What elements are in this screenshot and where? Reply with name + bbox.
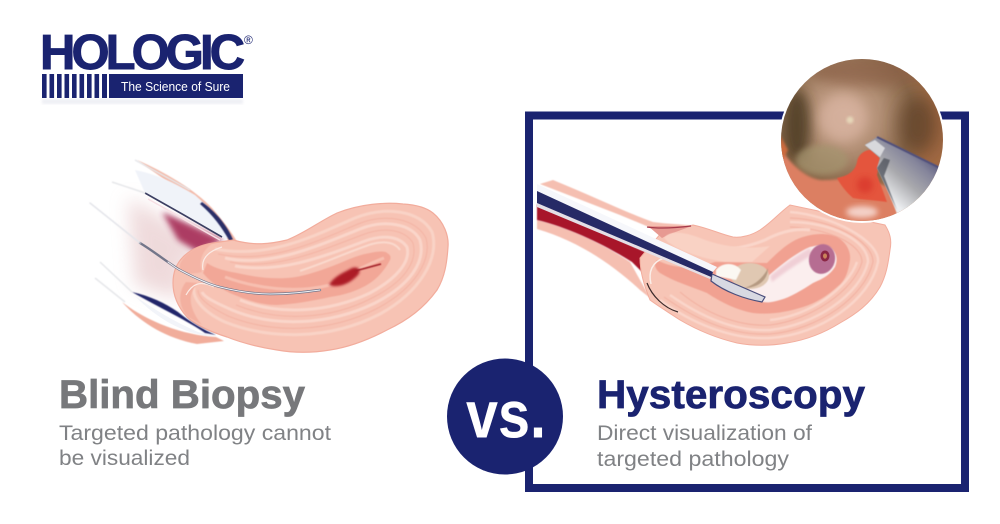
lower vaginal wall	[122, 302, 224, 344]
ostium center	[823, 253, 827, 259]
upper vaginal wall	[540, 180, 695, 240]
registered mark: ®	[244, 33, 253, 47]
illustration: blind biopsy	[90, 160, 448, 352]
pale wall highlight	[846, 206, 878, 218]
biopsy catheter	[90, 203, 320, 294]
uterus body	[173, 203, 448, 352]
logo tagline: The Science of Sure	[121, 80, 230, 94]
pale haze	[128, 198, 215, 300]
ostium opening	[820, 250, 830, 262]
polyp lesion	[837, 150, 887, 202]
polyp mottling	[857, 177, 873, 193]
cavity shadow	[770, 248, 812, 282]
left shadow	[783, 89, 811, 161]
logo stripes	[42, 74, 107, 98]
inset endoscopic view	[779, 57, 945, 225]
tissue highlight	[819, 94, 867, 142]
green-gray fold	[796, 145, 848, 175]
upper speculum blade	[135, 170, 234, 242]
shaft lower highlight	[537, 203, 711, 279]
tissue base	[780, 58, 945, 223]
text: hysteroscopy	[597, 373, 866, 471]
tissue speck	[846, 116, 854, 124]
shaft dark core	[537, 191, 713, 277]
top shade	[810, 58, 930, 86]
uterus body	[640, 205, 891, 345]
orange rim	[781, 136, 789, 160]
lower wall	[782, 150, 902, 221]
logo: Hologic	[40, 26, 253, 104]
polyp highlight	[716, 264, 741, 280]
heading: hysteroscopy: Hysteroscopy	[597, 373, 866, 417]
inset border	[779, 57, 945, 223]
instrument top edge	[877, 137, 940, 168]
body line 1: Targeted pathology cannot	[59, 422, 331, 445]
fornix line	[647, 226, 691, 228]
hysteroscope shaft	[537, 184, 717, 279]
endometrial layer	[655, 234, 850, 314]
right shadow	[898, 95, 938, 155]
instrument tip highlight	[865, 140, 885, 157]
cavity	[747, 245, 837, 302]
uterus layers	[660, 212, 878, 338]
cervix edge highlight	[186, 247, 222, 295]
cervix dark line	[647, 283, 678, 312]
instrument	[865, 137, 945, 214]
frame: hysteroscopy panel	[529, 116, 965, 488]
upper vaginal wall	[137, 160, 238, 243]
cervix white edge	[650, 258, 664, 284]
lesion streak	[355, 264, 381, 271]
instrument inner edge	[877, 158, 897, 210]
text: blind biopsy	[59, 373, 331, 470]
endometrial canal	[203, 252, 391, 305]
lower vaginal wall	[537, 220, 650, 298]
cavity slit	[225, 258, 384, 289]
illustration: hysteroscopy	[537, 180, 891, 345]
logo reflection	[42, 99, 243, 104]
uterus layers	[194, 211, 434, 335]
body line 2: targeted pathology	[597, 448, 790, 471]
polyp	[731, 263, 769, 289]
ostium	[806, 241, 838, 277]
maroon vaginal shading	[162, 212, 224, 252]
badge: vs.	[447, 358, 563, 474]
hysteroscope tip	[711, 274, 765, 302]
vaginal canal blood	[537, 204, 650, 280]
logo tagline bar	[109, 74, 243, 98]
body line 1: Direct visualization of	[597, 422, 812, 445]
fornix pouch	[648, 226, 692, 238]
cervix upper lip	[664, 233, 770, 262]
cervix lip	[180, 243, 213, 274]
lesion	[329, 267, 360, 286]
badge text: vs.	[466, 378, 546, 452]
shaft white top	[537, 184, 717, 273]
lower speculum blade	[132, 292, 216, 336]
heading: blind biopsy: Blind Biopsy	[59, 373, 306, 417]
logo wordmark: HOLOGIC	[40, 26, 245, 80]
body line 2: be visualized	[59, 447, 190, 470]
polyp shadow	[744, 268, 768, 288]
faded instrument handles	[95, 160, 190, 302]
